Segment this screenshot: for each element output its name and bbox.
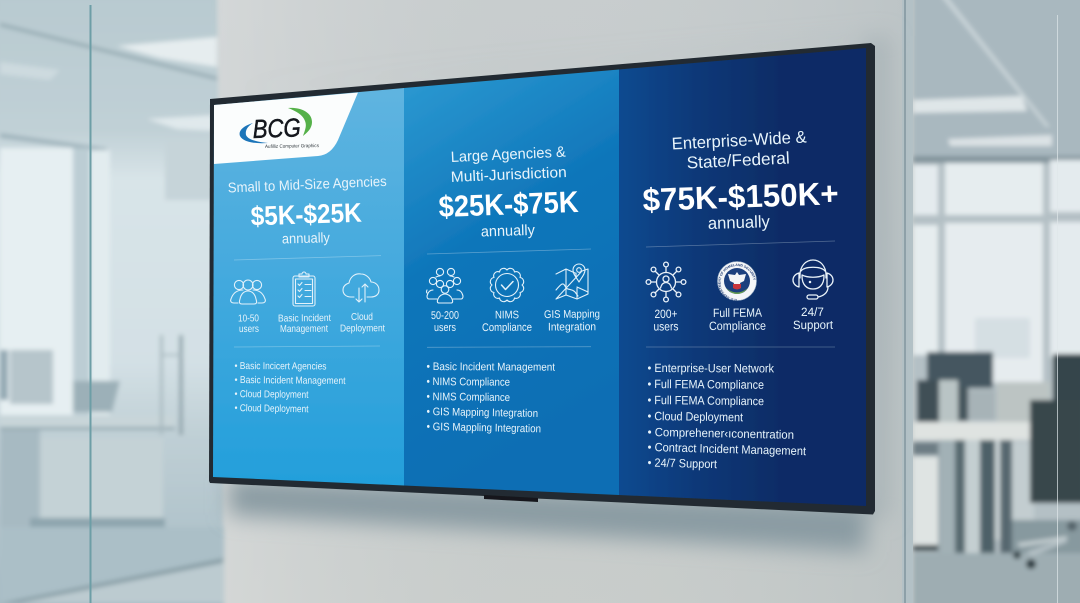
feature list [647, 361, 807, 471]
icon: users [231, 280, 265, 304]
display bezel [209, 43, 875, 514]
label: 50-200 users: users [434, 322, 456, 334]
mount tab [484, 495, 538, 502]
label: cloud deployment: Cloud [351, 312, 373, 323]
feature list: • Enterprise-User Network [647, 361, 775, 375]
feature list: • Cloud Deployment [234, 403, 309, 415]
glass door edge [90, 5, 92, 603]
label: 24/7 support: Support [793, 318, 834, 332]
label: full FEMA compliance: Compliance [709, 319, 766, 333]
panel: small to mid-size agencies [213, 88, 404, 486]
logo: BCG swooshes [240, 108, 312, 143]
feature list: • Contract Incident Management [647, 440, 807, 458]
label: basic incident management: Basic Incident [278, 313, 331, 324]
logo: BCG wordmark: BCG [252, 112, 301, 144]
icon: headset support [793, 260, 833, 299]
label: GIS mapping integration: Integration [548, 321, 596, 333]
background: right office behind glass [913, 0, 1080, 603]
label: 50-200 users: 50-200 [431, 310, 459, 322]
feature list: • Basic Incicert Agencies [234, 361, 327, 372]
label: GIS mapping integration [544, 308, 600, 333]
annually: annually [708, 212, 771, 233]
label: 200+ users: 200+ [654, 307, 678, 321]
label: NIMS compliance [482, 309, 532, 334]
panel: enterprise-wide and state/federal [619, 48, 866, 506]
feature list [426, 361, 555, 435]
icon: users group [427, 268, 463, 303]
logo: tagline: Aufilliz Computer Graphics [265, 143, 320, 150]
label: 10-50 users: users [239, 324, 259, 335]
icon: cloud [343, 274, 379, 302]
feature list: • Comprehener‹ıconentration [647, 425, 794, 442]
logo plate [214, 92, 358, 164]
feature list: • 24/7 Support [647, 456, 718, 471]
price: $25K-$75K [438, 186, 579, 224]
background: wall [215, 0, 907, 603]
label: 24/7 support [793, 305, 834, 332]
feature list: • GIS Mapping Integration [426, 406, 538, 420]
label: 200+ users [653, 307, 679, 333]
feature list: • Cloud Deployment [647, 409, 744, 424]
display shadow on wall [226, 36, 890, 552]
label: cloud deployment [340, 312, 385, 334]
background: left glass office [0, 0, 224, 603]
label: 10-50 users: 10-50 [238, 313, 259, 324]
price: $5K-$25K [250, 198, 363, 231]
label: full FEMA compliance [709, 306, 766, 333]
heading: State/Federal [686, 148, 790, 172]
heading: Enterprise-Wide & [671, 127, 808, 153]
label: 50-200 users [431, 310, 459, 334]
wall mounted display [209, 43, 875, 514]
label: basic incident management [278, 313, 331, 335]
heading: Small to Mid-Size Agencies [227, 173, 387, 195]
icon: GIS map [556, 264, 588, 299]
feature list [234, 361, 346, 415]
label: 200+ users: users [653, 319, 679, 333]
label: 24/7 support: 24/7 [801, 305, 824, 319]
feature list: • Cloud Deployment [234, 389, 309, 401]
feature list: • NIMS Compliance [426, 391, 510, 404]
glass partition frame [902, 0, 1058, 603]
feature list: • Full FEMA Compliance [647, 393, 764, 408]
panel: large agencies [404, 70, 619, 495]
feature list: • GIS Mappling Integration [426, 421, 541, 435]
feature list: • NIMS Compliance [426, 376, 510, 389]
label: NIMS compliance: Compliance [482, 322, 532, 334]
feature list: • Full FEMA Compliance [647, 377, 764, 392]
price: $75K-$150K+ [642, 175, 839, 218]
heading [450, 144, 567, 186]
label: cloud deployment: Deployment [340, 323, 385, 334]
heading [671, 127, 808, 172]
feature list: • Basic Incident Management [426, 361, 555, 374]
label: 10-50 users [238, 313, 259, 335]
label: full FEMA compliance: Full FEMA [713, 306, 762, 320]
feature list: • Basic Incident Management [234, 375, 346, 387]
heading: Large Agencies & [450, 144, 566, 166]
label: GIS mapping integration: GIS Mapping [544, 308, 600, 321]
icon: compliance medal [490, 268, 524, 302]
label: NIMS compliance: NIMS [495, 309, 519, 321]
icon: clipboard [293, 272, 315, 306]
annually: annually [481, 222, 536, 240]
label: basic incident management: Management [280, 324, 328, 335]
annually: annually [282, 229, 330, 246]
icon: user network [646, 262, 686, 302]
icon: DHS seal: U.S. DEPARTMENT OF HOMELAND SECURITY [718, 264, 756, 302]
heading: Multi-Jurisdiction [450, 164, 567, 186]
